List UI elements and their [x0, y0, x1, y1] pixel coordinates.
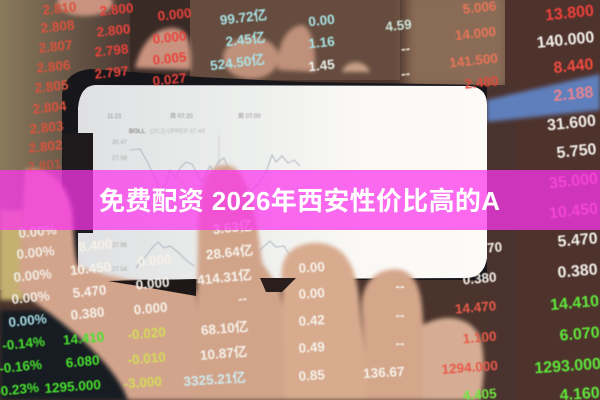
lower centre prices: 3.63亿: [212, 218, 253, 237]
right price column: [534, 3, 600, 400]
blue highlight band: [487, 74, 600, 122]
right price column: 10.450: [548, 201, 599, 223]
right price column: 8.440: [553, 56, 594, 77]
right price column: 13.800: [544, 3, 595, 25]
cyan turnover column: 0.00: [308, 12, 335, 29]
green falling values: -0.14%: [1, 334, 46, 353]
right price column: 1293.000: [534, 356, 600, 377]
phone screen: [63, 85, 487, 280]
cyan turnover column: 4.59: [385, 17, 412, 34]
lower centre prices: 0.00: [298, 259, 325, 276]
red price column 1: 2.807: [38, 37, 73, 56]
left hand prices: [69, 236, 172, 323]
right price column: 5.750: [556, 141, 597, 162]
left percentage column: [8, 222, 57, 330]
lower centre prices: --: [396, 279, 404, 294]
red price column 1: 2.803: [29, 118, 65, 137]
lower centre prices: 3325.21亿: [183, 370, 246, 389]
red price column 2: 0.005: [152, 49, 188, 68]
green falling values: [0, 324, 166, 399]
light red price column: 2.480: [464, 73, 499, 92]
lower centre prices: 0.42: [298, 312, 325, 329]
left hand prices: 0.000: [137, 252, 172, 269]
left hand prices: 0.380: [70, 304, 105, 323]
light red price column: 14.000: [454, 24, 497, 43]
light red price column: [448, 0, 499, 92]
red price column 2: 2.800: [96, 21, 131, 40]
stock chart on phone screen: [130, 135, 300, 268]
left hand prices: 0.000: [135, 275, 170, 292]
right price column: 0.380: [557, 261, 598, 282]
red price column 2: 2.800: [99, 0, 134, 19]
lower centre prices: 0.380: [462, 270, 497, 287]
green falling values: 14.410: [62, 329, 105, 348]
red price column 1: 2.801: [27, 156, 63, 175]
right price column: 2.188: [553, 84, 594, 105]
lower centre prices: 10.87亿: [199, 344, 248, 363]
left hand prices: 0.000: [133, 300, 168, 317]
left percentage column: 0.00%: [13, 266, 52, 285]
lower right red prices: 1.100: [462, 329, 497, 346]
phone screen small labels: 27.04: [112, 267, 128, 273]
phone screen small labels: 30.47: [112, 140, 128, 146]
lower centre prices: 0.85: [298, 367, 326, 384]
cyan turnover column: 1.45: [308, 57, 336, 74]
phone screen small labels: 周 07:00: [238, 113, 261, 120]
lower right red prices: 1294.000: [441, 358, 498, 377]
right price column: 31.600: [546, 113, 597, 135]
green falling values: -0.020: [127, 324, 166, 343]
right price column: 35.000: [548, 171, 599, 193]
phone screen small labels: 27.96: [112, 243, 128, 249]
red price column 1: 2.808: [40, 17, 76, 36]
red price column 1: 2.804: [32, 98, 68, 117]
lower centre prices: 414.31亿: [196, 267, 253, 288]
green falling values: -3.000: [123, 374, 162, 391]
left percentage column: 0.00%: [11, 288, 50, 307]
lower right red prices: 14.470: [454, 298, 497, 317]
lower centre prices: --: [396, 336, 404, 351]
left percentage column: 0.00%: [16, 243, 55, 262]
cyan turnover column: 99.72亿: [219, 7, 268, 28]
right price column: 6.070: [559, 324, 600, 345]
red price column 2: 0.027: [152, 70, 187, 89]
dark strip of phone below the screen: [108, 279, 196, 296]
phone screen small labels: (20,2) UPPER 87.44: [150, 129, 205, 135]
left hand prices: 10.450: [69, 259, 112, 278]
right price column: 140.000: [536, 29, 595, 52]
phone screen small labels: 周 07:20: [170, 113, 193, 120]
right price column: 14.410: [549, 293, 600, 314]
red price column 2: 0.000: [152, 28, 187, 47]
phone screen small labels: 11:21: [107, 114, 122, 120]
red price column 2: [94, 0, 192, 89]
cyan turnover column: 524.50亿: [209, 52, 266, 73]
red price column 1: 2.802: [28, 137, 63, 156]
lower centre prices: 0.49: [298, 339, 325, 356]
cyan turnover column: [209, 7, 412, 81]
title: 免费配资 2026年西安性价比高的A: [99, 186, 500, 216]
right price column: 5.470: [557, 230, 598, 251]
red price column 1: [27, 0, 77, 175]
left hand prices: 8.400: [78, 236, 113, 255]
phone screen small labels: [107, 113, 261, 273]
red price column 1: 2.806: [36, 57, 72, 76]
phone body: [62, 69, 487, 280]
green falling values: 1295.000: [44, 377, 101, 396]
green falling values: 6.080: [65, 353, 100, 370]
hand: upper fingertips: [57, 0, 370, 79]
lower centre prices: 70: [486, 239, 503, 256]
lower centre prices: --: [396, 308, 404, 323]
phone screen small labels: 27.58: [112, 156, 128, 162]
lower centre prices: [183, 218, 503, 389]
lower centre prices: --: [237, 291, 248, 306]
left percentage column: 0.00%: [18, 222, 57, 241]
red price column 2: 2.798: [94, 41, 130, 60]
red price column 2: 0.000: [157, 5, 192, 24]
lower centre prices: 136.67: [363, 364, 405, 381]
red price column 2: 2.797: [94, 63, 129, 82]
hand: thumb and fingers over the phone: [18, 165, 484, 400]
cyan turnover column: --: [400, 66, 411, 81]
cyan turnover column: --: [400, 41, 411, 56]
red price column 1: 2.805: [34, 77, 70, 96]
cyan turnover column: 2.45亿: [225, 30, 266, 49]
phone screen small labels: BOLL: [129, 129, 146, 135]
left percentage column: 0.00%: [8, 311, 47, 330]
left hand prices: 5.470: [72, 282, 107, 301]
lower centre prices: 68.10亿: [200, 319, 249, 338]
green falling values: -0.010: [127, 349, 166, 368]
cyan turnover column: 1.16: [308, 34, 336, 51]
lower right red prices: [441, 298, 498, 400]
light red price column: 141.500: [448, 51, 499, 71]
lower centre prices: 0.00: [298, 285, 325, 302]
lower centre prices: 28.64亿: [205, 243, 254, 262]
magenta title banner: [0, 170, 600, 230]
dark strip of phone right of the index finger: [260, 278, 296, 292]
